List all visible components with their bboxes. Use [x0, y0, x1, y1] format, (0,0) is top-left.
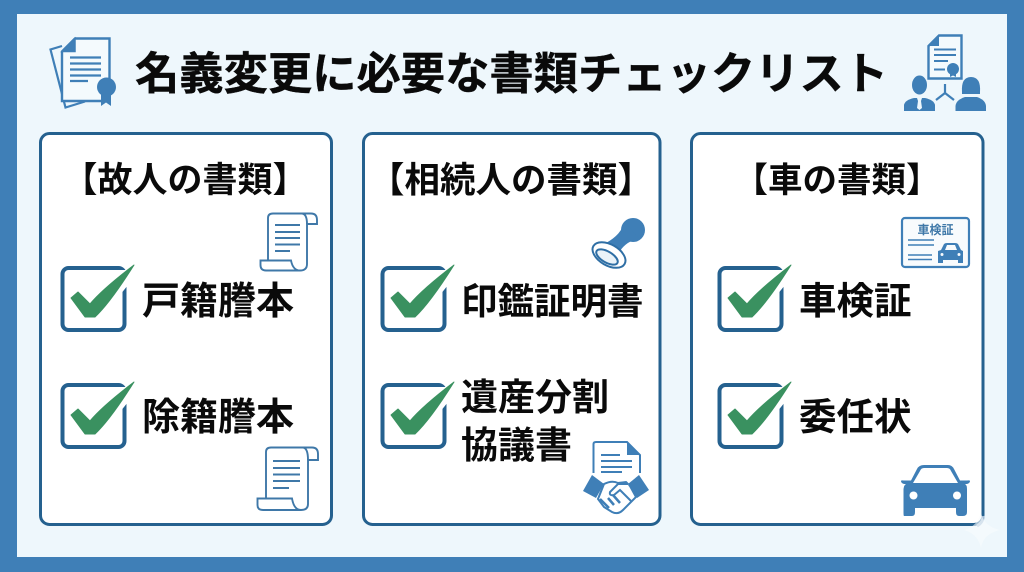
item: seal certificate: 印鑑証明書 — [461, 281, 644, 322]
item: vehicle inspection certificate: 車検証 — [799, 280, 912, 322]
icon: scroll 2 — [258, 448, 318, 510]
checkbox 5 — [720, 265, 791, 330]
checkbox 4 — [382, 382, 454, 447]
icon: document and handshake — [583, 442, 649, 513]
checkbox 6 — [720, 382, 791, 447]
heading: heir documents: 【相続人の書類】 — [369, 160, 653, 200]
panel: deceased documents — [40, 134, 332, 524]
checkbox 3 — [382, 265, 454, 330]
icon: vehicle inspection card — [902, 218, 969, 267]
icon: car — [901, 465, 970, 516]
item: estate division agreement: 遺産分割 — [461, 377, 609, 418]
heading: vehicle documents: 【車の書類】 — [734, 162, 940, 200]
icon: stamp — [588, 218, 645, 273]
checkbox 1 — [62, 265, 134, 330]
item: power of attorney: 委任状 — [799, 396, 912, 438]
item: estate division agreement — [461, 377, 609, 466]
sparkle watermark — [964, 512, 1000, 548]
item: removed register: 除籍謄本 — [142, 397, 294, 439]
title: 名義変更に必要な書類チェックリスト — [135, 50, 888, 99]
panel: vehicle documents — [692, 134, 983, 524]
item: estate division agreement: 協議書 — [461, 425, 572, 466]
checkbox 2 — [62, 382, 134, 447]
icon: certificate document with seal — [50, 38, 116, 108]
icon: document with two people — [904, 36, 986, 111]
panel: heir documents — [364, 134, 660, 524]
item: family register: 戸籍謄本 — [142, 281, 294, 323]
heading: deceased documents: 【故人の書類】 — [62, 161, 308, 200]
icon: vehicle inspection card: 車検証 — [917, 222, 954, 237]
icon: scroll — [260, 214, 317, 270]
